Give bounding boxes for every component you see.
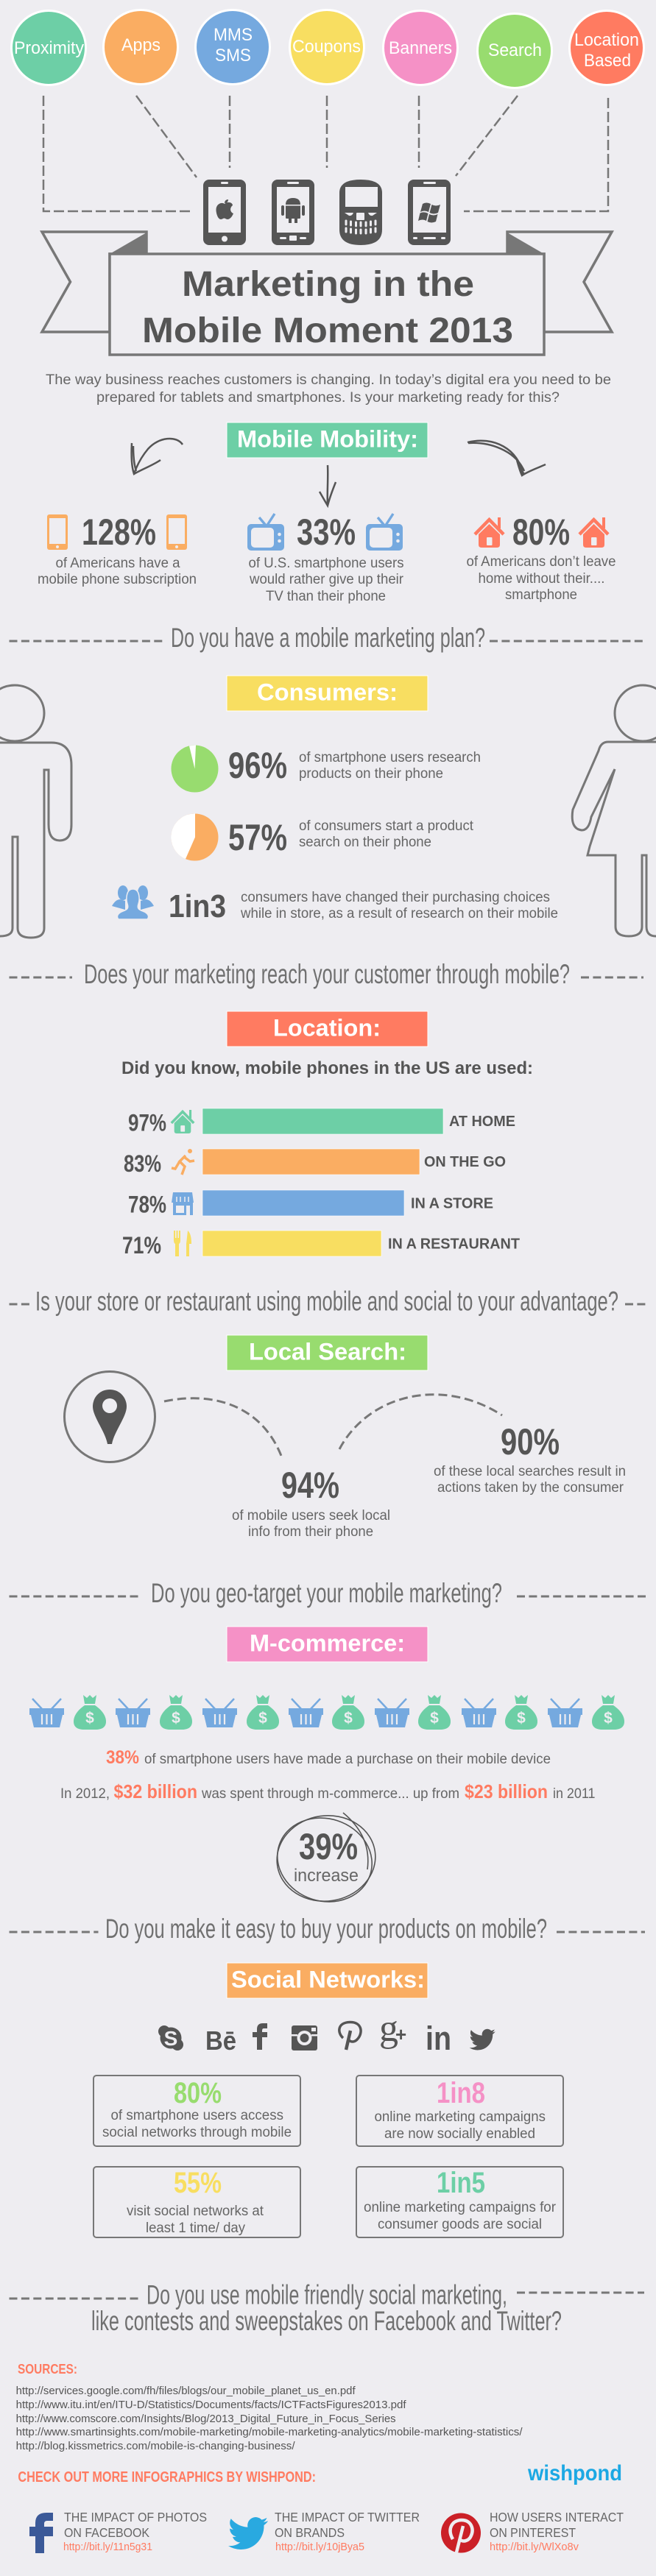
- stat box: 1 in 8: 1in8: [437, 2077, 485, 2109]
- bar row: at home: AT HOME: [449, 1114, 515, 1130]
- stat box: 80%: [94, 2076, 300, 2146]
- caption: TV than their phone: [266, 589, 386, 604]
- bar row: on the go: [124, 1149, 506, 1177]
- stat: 33%: [247, 512, 404, 604]
- icon: twitter: [470, 2029, 495, 2050]
- caption: smartphone: [505, 587, 577, 603]
- stat: 90% local: actions taken by the consumer: [437, 1480, 624, 1496]
- ribbon right tail: [507, 232, 612, 332]
- ribbon left tail: [42, 232, 147, 332]
- icon: tv: [366, 514, 403, 551]
- bubble: Coupons: Coupons: [292, 37, 361, 57]
- caption: of consumers start a product: [299, 818, 474, 834]
- stat box: 55%: least 1 time/ day: [146, 2221, 245, 2236]
- stat: 90% local: 90%: [501, 1421, 560, 1462]
- stat: 38% purchase: 38%: [106, 1747, 139, 1768]
- icon: google plus: g: [379, 2008, 398, 2050]
- link: facebook infographic: THE IMPACT OF PHOTOS: [64, 2510, 207, 2524]
- callout: 39% increase: 39%: [299, 1826, 358, 1867]
- caption: of smartphone users research: [299, 750, 481, 765]
- ribbon main panel: [110, 254, 544, 355]
- bubble: MMS SMS: SMS: [215, 46, 251, 66]
- icon: twitter: [228, 2517, 268, 2550]
- bubble: Coupons: [290, 10, 364, 84]
- stat: 90% local: of these local searches result in: [434, 1464, 626, 1479]
- icon: instagram: [292, 2025, 317, 2050]
- arrow: hand drawn right: [468, 441, 546, 475]
- bar row: on the go: ON THE GO: [424, 1154, 506, 1170]
- ribbon fold left: [110, 233, 147, 254]
- stat: 57% pie: [171, 813, 474, 861]
- link: facebook infographic: [29, 2510, 207, 2553]
- pie chart 57%: [171, 813, 218, 861]
- dashed curve to 94%: [164, 1398, 281, 1456]
- caption: [249, 556, 404, 604]
- icon: google plus: +: [395, 2023, 406, 2045]
- stat box: 1 in 5: [356, 2167, 563, 2237]
- bar row: in a restaurant: IN A RESTAURANT: [388, 1236, 520, 1253]
- bubble: Banners: Banners: [389, 38, 452, 58]
- bubble: Apps: Apps: [121, 35, 161, 55]
- sources heading: SOURCES:: [18, 2362, 77, 2377]
- link: pinterest infographic: http://bit.ly/WlXo8v: [490, 2541, 579, 2553]
- stat box: 80%: of smartphone users access: [110, 2108, 283, 2123]
- bubble: Search: Search: [488, 40, 542, 60]
- stat: spending in billions: [60, 1780, 595, 1802]
- stat: spending in billions: $32 billion: [113, 1780, 197, 1802]
- intro text: [46, 372, 611, 406]
- figure: woman outline: [572, 685, 656, 936]
- bar row: at home: [128, 1108, 515, 1136]
- icon: phone: [47, 514, 68, 550]
- bubble: MMS SMS: [196, 10, 269, 84]
- caption: [467, 554, 616, 603]
- heading: Consumers: [227, 676, 428, 711]
- stat: 94% local: info from their phone: [248, 1524, 373, 1540]
- number: 128%: [82, 512, 156, 553]
- icon: google plus: [379, 2008, 406, 2050]
- heading: Consumers: Consumers:: [257, 679, 398, 705]
- link: pinterest infographic: HOW USERS INTERACT: [490, 2510, 624, 2524]
- caption: search on their phone: [299, 835, 431, 850]
- ribbon fold right: [507, 233, 544, 254]
- stat box: 1 in 5: 1in5: [437, 2167, 485, 2199]
- subheading: phones used: Did you know, mobile phones in the US are used:: [121, 1058, 533, 1078]
- icon: phone: [166, 514, 187, 550]
- intro text: The way business reaches customers is changing. In today’s digital era you need to be: [46, 372, 611, 388]
- icon: pinterest: [441, 2513, 481, 2552]
- stat: 38% purchase: [106, 1747, 551, 1768]
- question: contests and sweepstakes: [9, 2280, 644, 2336]
- sources list: [16, 2385, 523, 2452]
- icon: skype: [158, 2025, 183, 2050]
- bar row: in a restaurant: 71%: [122, 1232, 161, 1259]
- stat box: 1 in 5: consumer goods are social: [378, 2217, 542, 2232]
- number: 96%: [228, 745, 287, 786]
- dashed connectors from bubbles to phones: [43, 96, 608, 211]
- stat: 90% local: [434, 1421, 626, 1496]
- link: facebook infographic: http://bit.ly/11n5g31: [63, 2541, 152, 2553]
- icon: iPhone: [203, 180, 246, 245]
- callout: 39% increase: [267, 1806, 383, 1914]
- bubble: Search: [477, 13, 552, 88]
- icon row: baskets and money bags: [29, 1695, 624, 1730]
- bubble: Proximity: [12, 10, 85, 85]
- link: twitter infographic: http://bit.ly/10jBya5: [275, 2541, 364, 2553]
- sources list: http://www.smartinsights.com/mobile-marketing/mobile-marketing-analytics/mobile-marketing-statistics/: [16, 2426, 523, 2438]
- stat box: 55%: visit social networks at: [127, 2204, 264, 2219]
- stat: spending in billions: in 2011: [553, 1786, 595, 1802]
- icon: Windows phone: [408, 180, 451, 245]
- caption: home without their....: [479, 571, 605, 587]
- heading: Local Search: Local Search:: [249, 1338, 406, 1365]
- caption: mobile phone subscription: [38, 572, 197, 587]
- bubble: Proximity: Proximity: [14, 38, 84, 58]
- bar chart: where phones are used: [122, 1108, 520, 1259]
- callout: 39% increase: increase: [294, 1866, 359, 1886]
- caption: [299, 750, 481, 782]
- stat box: 1 in 5: online marketing campaigns for: [364, 2200, 557, 2215]
- link: twitter infographic: ON BRANDS: [275, 2525, 345, 2540]
- bar row: in a restaurant: [122, 1231, 520, 1259]
- icon: house: [579, 517, 608, 548]
- icon: behance: Bē: [205, 2025, 236, 2056]
- stat box: 80%: 80%: [174, 2077, 222, 2109]
- link: twitter infographic: [228, 2510, 420, 2553]
- dashed curve to 90%: [339, 1395, 502, 1449]
- icon: house: [475, 517, 504, 548]
- pie chart 96%: [171, 745, 218, 792]
- question: mobile marketing plan: Do you have a mobile marketing plan?: [171, 623, 485, 653]
- caption: of Americans don’t leave: [467, 554, 616, 570]
- bar row: in a store: IN A STORE: [411, 1195, 493, 1211]
- bubble: Banners: [383, 10, 458, 85]
- stat box: 80%: social networks through mobile: [102, 2125, 292, 2140]
- heading: Location: Location:: [273, 1014, 381, 1041]
- caption: while in store, as a result of research on their mobile: [240, 906, 558, 921]
- icon: people: [112, 885, 154, 919]
- call to action heading: CHECK OUT MORE INFOGRAPHICS BY WISHPOND:: [18, 2469, 316, 2485]
- bar row: at home: 97%: [128, 1110, 166, 1136]
- heading: M-commerce: [227, 1627, 428, 1662]
- intro text: prepared for tablets and smartphones. Is your marketing ready for this?: [96, 390, 560, 406]
- heading: Mobile Mobility: [227, 422, 428, 458]
- icon: facebook: [253, 2023, 267, 2050]
- heading: M-commerce: M-commerce:: [250, 1630, 405, 1656]
- title text line one: Marketing in the: [182, 265, 474, 304]
- sources list: http://blog.kissmetrics.com/mobile-is-changing-business/: [16, 2440, 295, 2452]
- icon: BlackBerry phone: [339, 180, 382, 245]
- bubble: Location Based: Location: [574, 30, 639, 50]
- bar row: on the go: 83%: [124, 1150, 161, 1177]
- link: twitter infographic: THE IMPACT OF TWITTER: [275, 2510, 420, 2524]
- arrow: hand drawn centre: [320, 465, 336, 506]
- bubble: Apps: [103, 10, 178, 84]
- link: pinterest infographic: ON PINTEREST: [490, 2525, 576, 2540]
- bubble: Location Based: Based: [584, 51, 631, 71]
- title ribbon: [42, 232, 612, 355]
- stat: 96% pie: [171, 745, 481, 792]
- question: geo-target: Do you geo-target your mobile marketing?: [151, 1578, 502, 1608]
- stat: spending in billions: $23 billion: [465, 1780, 548, 1802]
- social icons row: [158, 2008, 495, 2057]
- figure: man outline: [0, 685, 71, 938]
- stat box: 1 in 8: are now socially enabled: [384, 2126, 535, 2142]
- sources list: http://services.google.com/fh/files/blogs/our_mobile_planet_us_en.pdf: [16, 2385, 356, 2397]
- link: pinterest infographic: [441, 2510, 624, 2553]
- stat box: 55%: 55%: [174, 2167, 222, 2199]
- caption: would rather give up their: [249, 572, 404, 587]
- heading: Mobile Mobility: Mobile Mobility:: [237, 425, 418, 452]
- caption: [240, 890, 558, 921]
- icon: map pin in circle: [65, 1372, 155, 1462]
- caption: consumers have changed their purchasing choices: [241, 890, 550, 905]
- stat: 1 in 3: [112, 885, 558, 924]
- bubble: MMS SMS: MMS: [214, 25, 253, 45]
- bar row: in a store: [128, 1190, 493, 1217]
- icon: facebook: [29, 2513, 53, 2553]
- stat: 94% local: of mobile users seek local: [232, 1508, 390, 1524]
- bubble: Location Based: [570, 10, 643, 85]
- icon: Android phone: [272, 180, 314, 245]
- stat box: 1 in 8: [356, 2076, 563, 2146]
- caption: [38, 556, 197, 587]
- stat: 94% local: [232, 1465, 390, 1540]
- heading: Local Search: [227, 1335, 428, 1370]
- number: 33%: [297, 512, 356, 553]
- stat: 128%: [38, 512, 197, 587]
- stat: spending in billions: was spent through m-commerce... up from: [201, 1786, 459, 1802]
- caption: of U.S. smartphone users: [249, 556, 403, 571]
- link: facebook infographic: ON FACEBOOK: [64, 2525, 149, 2540]
- stat: 94% local: 94%: [281, 1465, 339, 1506]
- icon: tv: [247, 514, 284, 551]
- icon: pinterest: [339, 2022, 361, 2050]
- number: 1in3: [169, 888, 226, 924]
- heading: Location: [227, 1011, 428, 1047]
- number: 57%: [228, 817, 287, 858]
- icon: skype: S: [164, 2027, 177, 2050]
- stat: spending in billions: In 2012,: [60, 1786, 110, 1802]
- number: 80%: [512, 512, 570, 553]
- caption: products on their phone: [299, 766, 443, 782]
- stat: 80%: [467, 512, 616, 603]
- sources list: http://www.itu.int/en/ITU-D/Statistics/Documents/facts/ICTFactsFigures2013.pdf: [16, 2399, 406, 2411]
- logo: wishpond: wishpond: [527, 2461, 622, 2485]
- stat box: 55%: [94, 2167, 300, 2237]
- caption: [299, 818, 474, 850]
- stat: 38% purchase: of smartphone users have made a purchase on their mobile device: [144, 1752, 551, 1767]
- bar row: in a store: 78%: [128, 1191, 166, 1217]
- icon: linkedin: in: [426, 2020, 451, 2057]
- arrow: hand drawn left: [132, 439, 183, 474]
- stat box: 1 in 8: online marketing campaigns: [374, 2109, 546, 2125]
- heading: Social Networks: Social Networks:: [231, 1967, 425, 1993]
- caption: of Americans have a: [56, 556, 180, 571]
- sources list: http://www.comscore.com/Insights/Blog/2013_Digital_Future_in_Focus_Series: [16, 2413, 396, 2425]
- title text line two: Mobile Moment 2013: [142, 311, 513, 350]
